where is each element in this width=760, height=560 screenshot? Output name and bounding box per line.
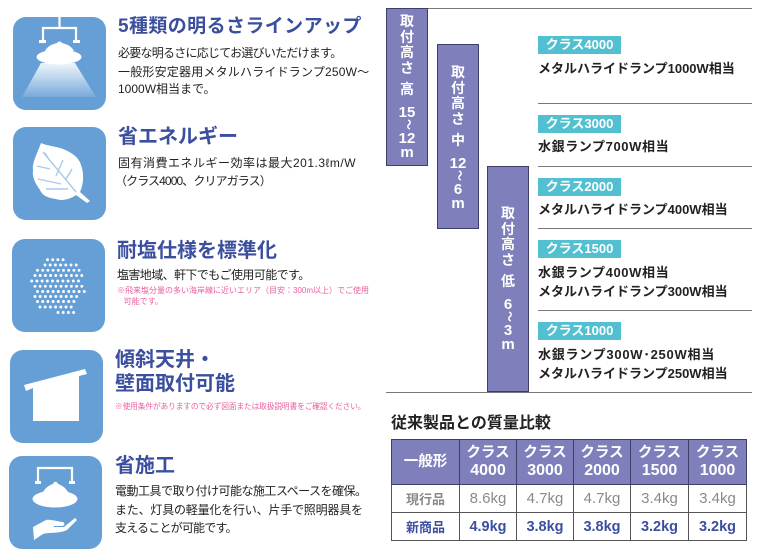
mounting height bar: high: さ [400, 60, 414, 76]
mounting height bar: low: 取 [501, 205, 515, 221]
mounting height bar: middle: 12 [450, 154, 466, 172]
panel: energy saving [13, 126, 356, 220]
icon: house with sloped roof [10, 350, 103, 443]
mounting height bar: middle: 中 [451, 132, 465, 148]
mounting height bar: high [386, 8, 428, 166]
panel: mounting height and class chart [386, 8, 752, 393]
panel: salt resistance [12, 239, 369, 332]
heading: weight comparison: 従来製品との質量比較 [391, 415, 551, 432]
panel: sloped ceiling and wall mounting [10, 348, 365, 443]
class 2000 badge: クラス2000 [546, 179, 613, 194]
text: energy saving description [115, 156, 356, 188]
class 2000 lamp equivalent: メタルハライドランプ400W相当 [538, 202, 728, 217]
heading: sloped ceiling and wall mounting: 壁面取付可能 [115, 373, 235, 395]
icon: dot cluster [12, 239, 105, 332]
class 4000 badge: クラス4000 [546, 37, 613, 52]
mounting height bar: middle: m [451, 194, 465, 212]
class 4000 lamp equivalent: メタルハライドランプ1000W相当 [538, 61, 735, 76]
heading: energy saving: 省エネルギー [118, 126, 238, 148]
mounting height bar: middle: 6 [454, 180, 462, 198]
mounting height bar: low: 低 [501, 273, 515, 289]
class 3000 badge [538, 115, 621, 133]
mounting height bar: low: 付 [501, 220, 515, 236]
table: weight comparison: 4.9kg [469, 518, 507, 534]
icon: light held by hand [9, 456, 102, 549]
mounting height bar: low: ～ [502, 310, 514, 322]
mounting height bar: low: m [501, 336, 515, 352]
table: weight comparison: 一般形 [404, 454, 447, 470]
table: weight comparison: 3.2kg [641, 518, 678, 534]
table: weight comparison: クラス [638, 445, 681, 461]
class 1500 badge: クラス1500 [546, 241, 613, 256]
class 4000 badge [538, 36, 621, 54]
table: weight comparison: 1000 [700, 462, 735, 479]
class 1000 badge [538, 322, 621, 340]
table: weight comparison: 8.6kg [470, 490, 506, 507]
class 1000 lamp equivalents: 水銀ランプ300W･250W相当 [538, 347, 715, 362]
mounting height bar: high: 高 [400, 81, 414, 97]
text: brightness description [118, 46, 369, 96]
class 1000 badge: クラス1000 [546, 323, 613, 338]
text: brightness description: 1000W相当まで。 [118, 82, 216, 96]
table: weight comparison [391, 439, 747, 541]
table: weight comparison: 現行品 [406, 492, 445, 507]
heading: salt resistance: 耐塩仕様を標準化 [117, 240, 277, 262]
text: brightness description: 必要な明るさに応じてお選びいただけます。 [118, 46, 341, 60]
note: usage condition caveat: ※使用条件がありますので必ず図面または取扱説明書をご確認ください。 [115, 402, 365, 411]
mounting height bar: low: 高 [501, 236, 515, 252]
table: weight comparison: 4.7kg [584, 490, 620, 507]
mounting height bar: middle: 高 [451, 95, 465, 111]
table: weight comparison: 3000 [527, 462, 563, 479]
class 1000 lamp equivalents: メタルハライドランプ250W相当 [538, 366, 728, 381]
table: weight comparison: 3.8kg [526, 518, 564, 534]
text: easy installation description [115, 484, 367, 535]
mounting height bar: high: 12 [399, 130, 415, 146]
table: weight comparison: 3.4kg [699, 490, 736, 507]
class 3000 badge: クラス3000 [546, 116, 613, 131]
note: salt resistance caveat [117, 286, 369, 306]
table: weight comparison: 4000 [470, 462, 506, 479]
table: weight comparison: クラス [580, 445, 624, 461]
panel: brightness lineup [13, 16, 369, 110]
mounting height bar: middle: 取 [451, 64, 465, 80]
mounting height bar: low [487, 166, 529, 392]
table: weight comparison: 2000 [584, 462, 620, 479]
table: weight comparison: クラス [466, 445, 510, 461]
table: weight comparison: 3.2kg [699, 518, 736, 534]
mounting height bar: low: さ [501, 252, 515, 268]
mounting height bar: high: 15 [399, 104, 415, 120]
class 1500 lamp equivalents [538, 265, 728, 299]
text: energy saving description: （クラス4000、クリアガラス） [115, 174, 271, 188]
table: weight comparison: 1500 [642, 462, 677, 479]
mounting height bar: high: m [400, 144, 414, 160]
text: brightness description: 一般形安定器用メタルハライドランプ250W～ [118, 65, 369, 79]
mounting height bar: high: 付 [400, 28, 414, 44]
mounting height bar: high: 高 [400, 44, 414, 60]
mounting height bar: low: 6 [504, 296, 512, 312]
mounting height bar: low: 3 [504, 322, 512, 338]
table: weight comparison: 4.7kg [527, 490, 563, 507]
table: weight comparison: 3.4kg [641, 490, 678, 507]
text: easy installation description: また、灯具の軽量化を行い、片手で照明器具を [115, 502, 363, 516]
class 1500 lamp equivalents: 水銀ランプ400W相当 [538, 265, 669, 280]
icon: leaf [13, 127, 106, 220]
icon: ceiling light with beam [13, 17, 106, 110]
heading: easy installation: 省施工 [115, 455, 175, 477]
text: easy installation description: 電動工具で取り付け可能な施工スペースを確保。 [115, 484, 367, 498]
heading: sloped ceiling and wall mounting [115, 348, 235, 395]
heading: sloped ceiling and wall mounting: 傾斜天井・ [115, 349, 215, 371]
class 2000 badge [538, 178, 621, 196]
text: energy saving description: 固有消費エネルギー効率は最大201.3ℓm/W [118, 156, 356, 170]
note: salt resistance caveat: 可能です。 [124, 297, 163, 306]
class 3000 lamp equivalent: 水銀ランプ700W相当 [538, 139, 669, 154]
heading: brightness lineup: 5種類の明るさラインアップ [118, 16, 362, 37]
text: salt resistance description: 塩害地域、軒下でもご使用可能です。 [117, 268, 310, 282]
mounting height bar: high: ～ [402, 118, 414, 130]
text: easy installation description: 支えることが可能です。 [115, 521, 237, 535]
mounting height bar: middle: 付 [451, 80, 465, 96]
table: weight comparison: クラス [523, 445, 567, 461]
table: weight comparison: 3.8kg [583, 518, 621, 534]
mounting height bar: middle: さ [451, 110, 465, 126]
panel: easy installation [9, 454, 367, 549]
class 1000 lamp equivalents [538, 347, 728, 381]
mounting height bar: middle: ～ [452, 170, 464, 180]
note: salt resistance caveat: ※飛来塩分量の多い海岸線に近いエリア（目安：300m以上）でご使用 [117, 286, 369, 295]
table: weight comparison: 新商品 [406, 520, 445, 535]
table: weight comparison: クラス [696, 445, 739, 461]
mounting height bar: middle [437, 44, 479, 229]
class 1500 lamp equivalents: メタルハライドランプ300W相当 [538, 284, 728, 299]
class 1500 badge [538, 240, 621, 258]
mounting height bar: high: 取 [400, 13, 414, 29]
